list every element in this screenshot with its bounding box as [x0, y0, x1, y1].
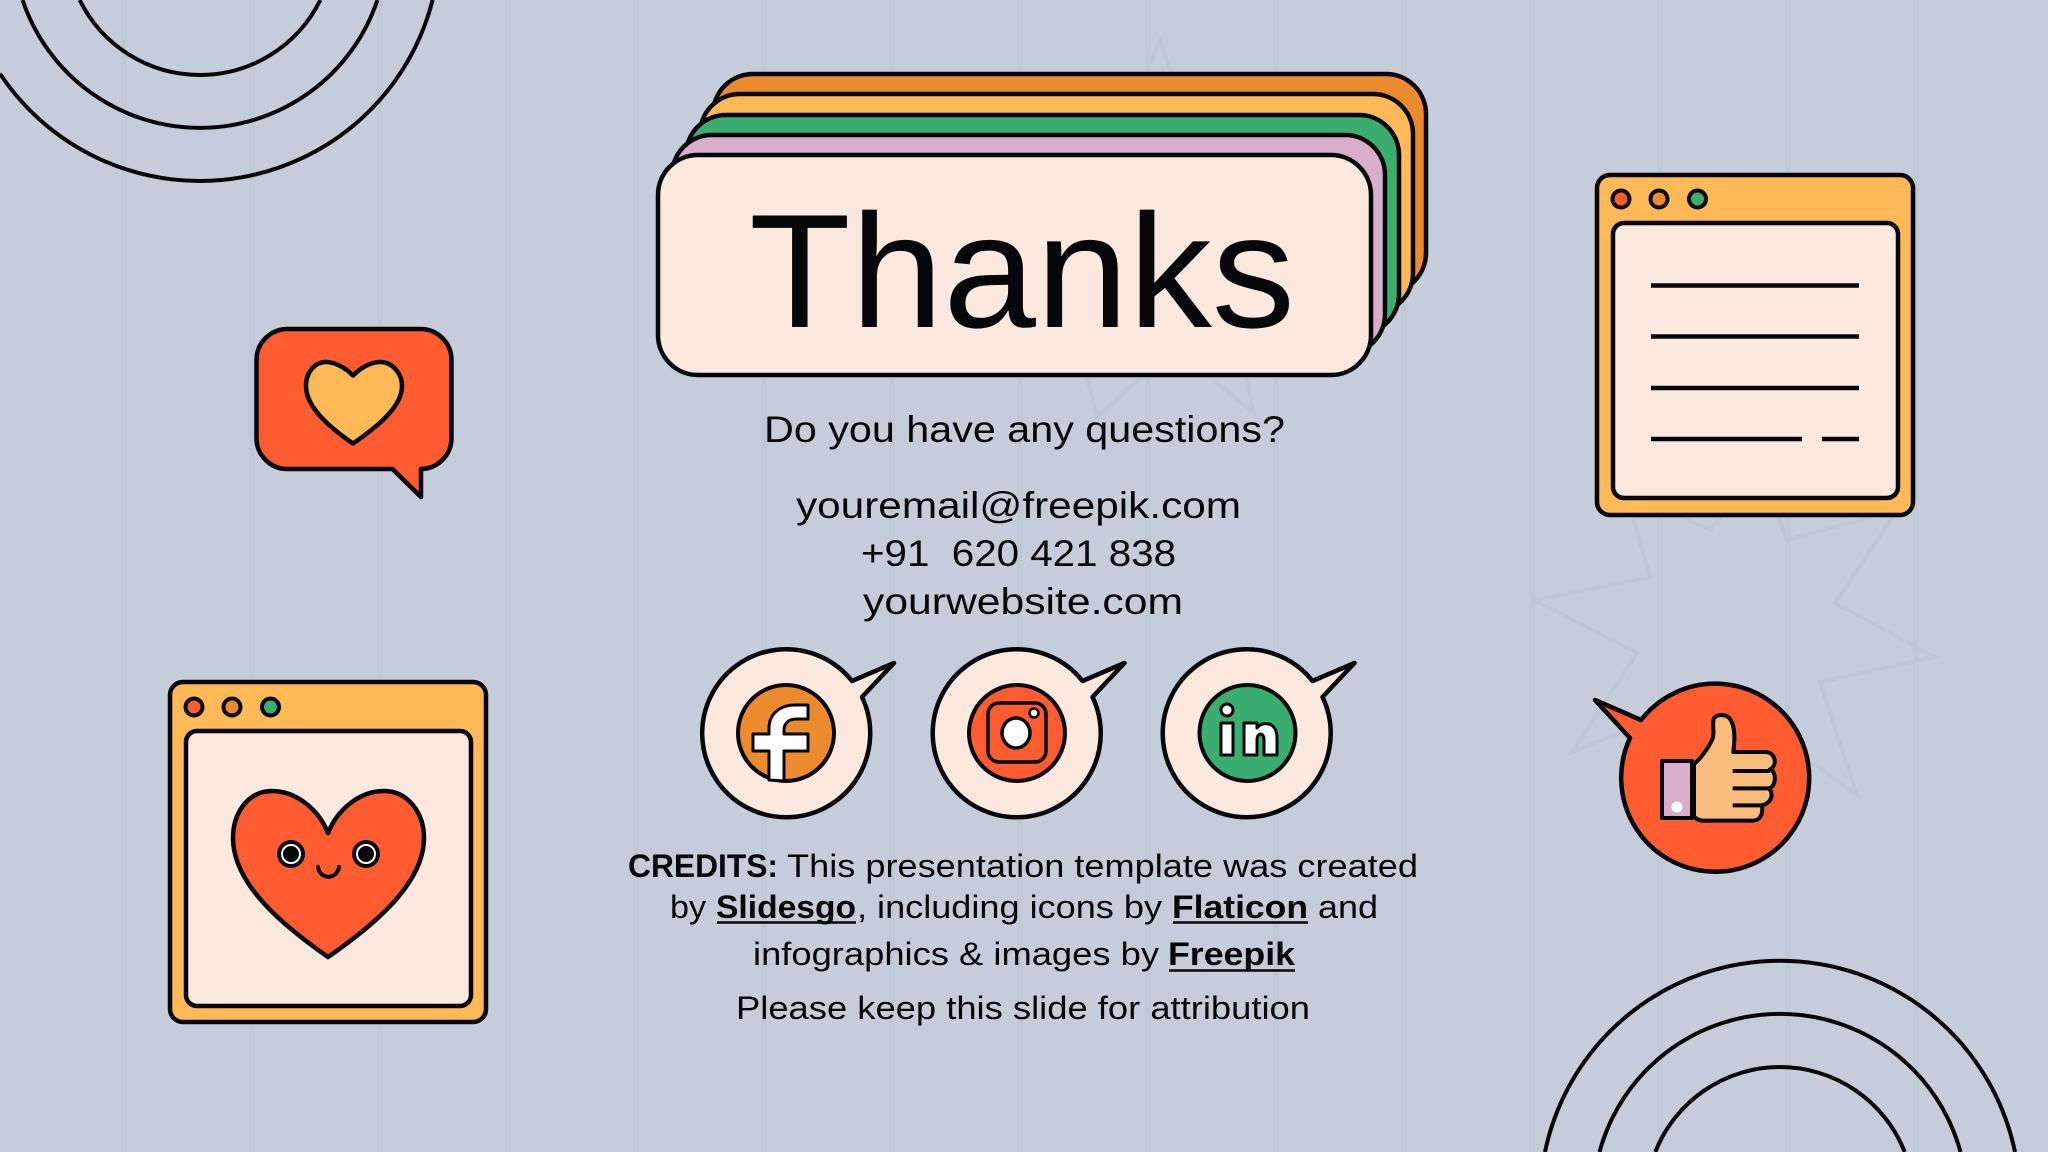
decorative rings: bottom right [1545, 961, 2015, 1152]
card: orange [713, 74, 1426, 293]
window: smiling heart [170, 682, 486, 1022]
window buttons [1612, 190, 1706, 208]
credits line 2: and [1318, 889, 1378, 925]
card: green [686, 115, 1399, 334]
credits line 2: , including icons by [857, 889, 1162, 925]
icon: facebook bubble [702, 649, 894, 817]
decorative rings: top left [0, 0, 433, 181]
cuff [1662, 761, 1692, 818]
icon: heart speech bubble [256, 329, 452, 497]
contact details [796, 485, 1241, 622]
credits line 3 [753, 936, 1295, 972]
credits line 2: Flaticon [1172, 889, 1308, 925]
credits text [628, 848, 1418, 1026]
text placeholder lines [1651, 286, 1859, 439]
credits line 3: Freepik [1168, 936, 1295, 972]
credits line 1: CREDITS: [628, 848, 778, 884]
credits line 2: Slidesgo [716, 889, 856, 925]
card: yellow [700, 94, 1413, 313]
website: yourwebsite.com [863, 581, 1183, 622]
window buttons [186, 698, 279, 716]
hand [1694, 715, 1775, 821]
credits line 2 [670, 889, 1378, 925]
card: front cream [658, 155, 1371, 375]
phone: +91 620 421 838 [861, 533, 1176, 574]
attribution note: Please keep this slide for attribution [736, 990, 1310, 1026]
email: youremail@freepik.com [796, 485, 1241, 526]
icon: thumbs up bubble [1595, 684, 1809, 872]
card: pink [672, 135, 1385, 354]
question text: Do you have any questions? [764, 409, 1285, 450]
title card stack [658, 74, 1426, 375]
window: text lines [1597, 175, 1913, 515]
icon: smiling heart [233, 791, 424, 957]
credits line 1: This presentation template was created [787, 848, 1418, 884]
icon: linkedin bubble [1163, 649, 1354, 817]
title: Thanks [749, 181, 1295, 362]
icon: instagram bubble [933, 649, 1124, 817]
credits line 2: by [670, 889, 706, 925]
credits line 3: infographics & images by [753, 936, 1159, 972]
